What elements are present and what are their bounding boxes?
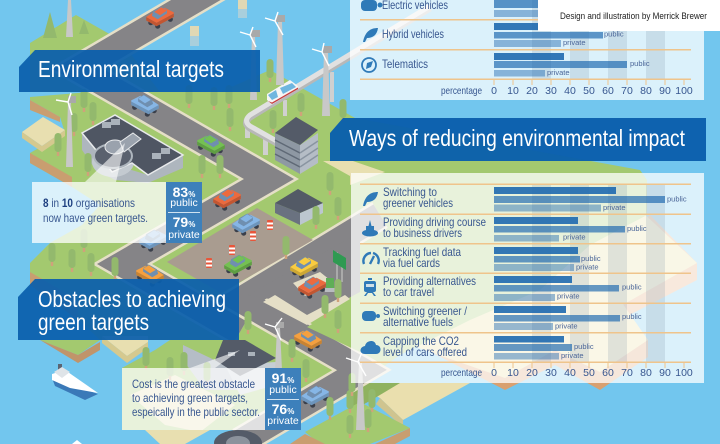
row: tracking fuel data: private (576, 262, 599, 272)
monorail train (267, 80, 298, 104)
bars: telematics (494, 53, 650, 77)
axis: percentage: 80 (640, 85, 652, 97)
axis: percentage: 70 (621, 367, 633, 379)
row: capping CO2 (360, 334, 594, 360)
axis: percentage: 50 (583, 367, 595, 379)
row: driving course: private (563, 232, 586, 242)
monorail track (245, 6, 430, 155)
bars: telematics: public (630, 59, 650, 68)
row: switching to greener vehicles: private (603, 203, 626, 212)
callout: green targets statistic: 8 in 10 organisations (43, 196, 135, 210)
axis: percentage: 100 (675, 85, 693, 97)
axis: percentage: 70 (621, 85, 633, 97)
callout: cost obstacle statistic: 76% (272, 401, 294, 417)
axis: percentage: 30 (545, 367, 557, 379)
heading: environmental targets: Environmental targets (38, 56, 224, 82)
storage building (275, 189, 323, 225)
row: alternatives to car travel: public (622, 282, 642, 292)
bars: hybrid vehicles (494, 23, 624, 47)
icon: hybrid leaf (363, 28, 378, 42)
credit box (538, 0, 720, 31)
axis: percentage: 60 (602, 85, 614, 97)
axis: percentage: 30 (545, 85, 557, 97)
wind turbines (56, 0, 366, 430)
bars: hybrid vehicles: public (604, 30, 624, 38)
bars: hybrid vehicles: private (563, 38, 586, 47)
axis: percentage: 60 (602, 367, 614, 379)
row: capping CO2: Capping the CO2 (383, 334, 459, 348)
row: alternatives to car travel: Providing alternatives (383, 274, 476, 288)
bars: electric vehicles (494, 0, 538, 17)
callout: cost obstacle statistic: private (267, 415, 299, 427)
helipad (214, 430, 262, 444)
axis: percentage: 0 (491, 85, 497, 97)
bridge pillars (190, 0, 247, 46)
barrels (206, 220, 273, 268)
cars (131, 7, 329, 408)
callout: cost obstacle statistic: public (269, 384, 297, 396)
roads (78, 0, 380, 442)
callout: green targets statistic: private (168, 229, 200, 241)
row: tracking fuel data (363, 245, 601, 272)
axis: percentage: 90 (659, 85, 671, 97)
panel: fleet technology chart (350, 0, 704, 100)
heading: environmental targets (19, 50, 260, 92)
axis: percentage: 40 (564, 85, 576, 97)
row: capping CO2: public (574, 342, 594, 351)
row: tracking fuel data: via fuel cards (383, 256, 440, 270)
axis: percentage: 80 (640, 367, 652, 379)
row: switching to greener vehicles: greener vehicles (383, 196, 453, 210)
lower office building (183, 340, 276, 395)
label: hybrid vehicles: Hybrid vehicles (382, 27, 444, 41)
callout: green targets statistic: public (170, 197, 198, 209)
heading: obstacles to achieving green targets: green targets (38, 309, 149, 335)
axis: percentage: 40 (564, 367, 576, 379)
label: telematics: Telematics (382, 57, 428, 71)
row: capping CO2: level of cars offered (383, 345, 467, 359)
axis: percentage: 10 (507, 85, 519, 97)
row: switching to greener vehicles: public (667, 194, 687, 204)
row: switching to greener vehicles (363, 185, 687, 212)
callout: green targets statistic: now have green targets. (43, 211, 148, 225)
petrol pump and sign (325, 250, 346, 292)
axis: percentage: 90 (659, 367, 671, 379)
office tower (275, 117, 318, 174)
row: driving course (362, 215, 647, 242)
HQ building (82, 115, 183, 183)
axis: percentage: 20 (526, 367, 538, 379)
row: alternatives to car travel: to car travel (383, 285, 434, 299)
panel: ways of reducing chart (351, 173, 704, 383)
callout: green targets statistic: 79% (173, 214, 195, 230)
icon: telematics compass (362, 58, 376, 72)
axis: percentage: 100 (675, 367, 693, 379)
parking bay (293, 272, 330, 296)
heading: obstacles to achieving green targets (18, 279, 239, 340)
axis: percentage: percentage (441, 85, 482, 97)
axis: percentage: 50 (583, 85, 595, 97)
axis: percentage: 0 (491, 367, 497, 379)
row: alternative fuels: Switching greener / (383, 304, 468, 318)
row: driving course: public (627, 224, 647, 233)
gravel lot (167, 208, 313, 293)
small white tip at bottom (72, 440, 82, 444)
heading: ways of reducing environmental impact (330, 118, 706, 161)
callout: green targets statistic (32, 143, 202, 243)
row: alternatives to car travel (364, 274, 642, 301)
callout: cost obstacle statistic: to achieving green targets, (132, 391, 248, 405)
credit box: Design and illustration by Merrick Brewer (560, 11, 707, 21)
icon: electric vehicles (361, 0, 382, 11)
axis: percentage: percentage (441, 367, 482, 379)
row: alternative fuels: alternative fuels (383, 315, 453, 329)
ship (52, 364, 98, 400)
row: tracking fuel data: Tracking fuel data (383, 245, 461, 259)
callout: cost obstacle statistic: Cost is the greatest obstacle (132, 377, 255, 391)
row: alternative fuels (362, 304, 642, 330)
callout: cost obstacle statistic: espeically in the public sector. (132, 405, 260, 419)
row: driving course: Providing driving course (383, 215, 486, 229)
axis: percentage: 10 (507, 367, 519, 379)
row: alternative fuels: public (622, 312, 642, 321)
axis: percentage: 20 (526, 85, 538, 97)
row: tracking fuel data: public (581, 254, 601, 263)
callout: green targets statistic: 83% (173, 184, 195, 200)
bars: telematics: private (547, 68, 570, 77)
row: driving course: to business drivers (383, 226, 462, 240)
row: switching to greener vehicles: Switching to (383, 185, 437, 199)
heading: obstacles to achieving green targets: Obstacles to achieving (38, 286, 226, 312)
row: alternative fuels: private (555, 322, 578, 330)
row: capping CO2: private (561, 351, 584, 360)
callout: cost obstacle statistic: 91% (272, 370, 294, 386)
axis: percentage (441, 362, 693, 379)
trees (43, 12, 376, 438)
axis: percentage (441, 79, 693, 97)
callout: cost obstacle statistic (122, 350, 301, 430)
row: alternatives to car travel: private (557, 292, 580, 300)
